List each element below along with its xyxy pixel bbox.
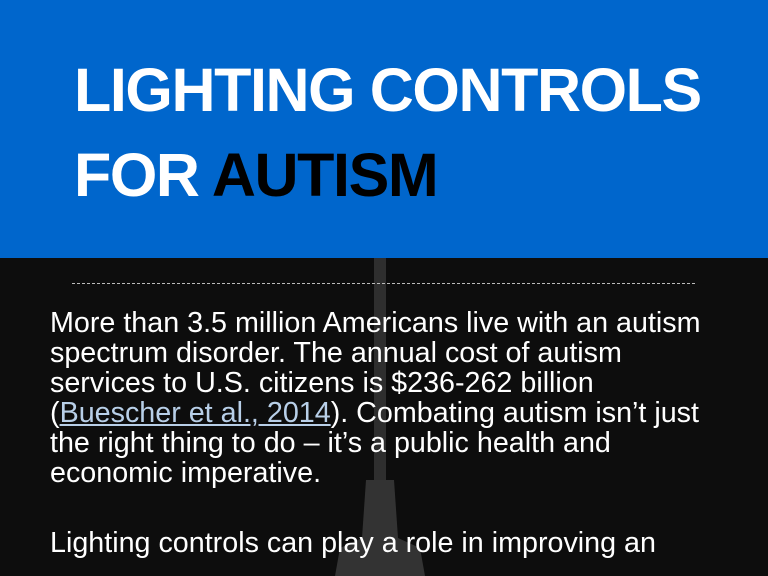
body text: More than 3.5 million Americans live with an autism: [50, 307, 701, 339]
body text: services to U.S. citizens is $236-262 billion: [50, 367, 594, 399]
body text: [50, 307, 701, 559]
title: LIGHTING CONTROLS: [74, 56, 701, 124]
body text: economic imperative.: [50, 457, 321, 489]
body text: Lighting controls can play a role in improving an: [50, 527, 656, 559]
divider: [72, 283, 695, 284]
body text: (Buescher et al., 2014). Combating autism isn’t just: [50, 397, 699, 429]
title: FOR AUTISM: [74, 141, 437, 209]
background lamp silhouette: [335, 258, 425, 576]
body text: spectrum disorder. The annual cost of autism: [50, 337, 622, 369]
header band: [0, 0, 768, 258]
body text: the right thing to do – it’s a public health and: [50, 427, 611, 459]
title: [74, 56, 701, 209]
